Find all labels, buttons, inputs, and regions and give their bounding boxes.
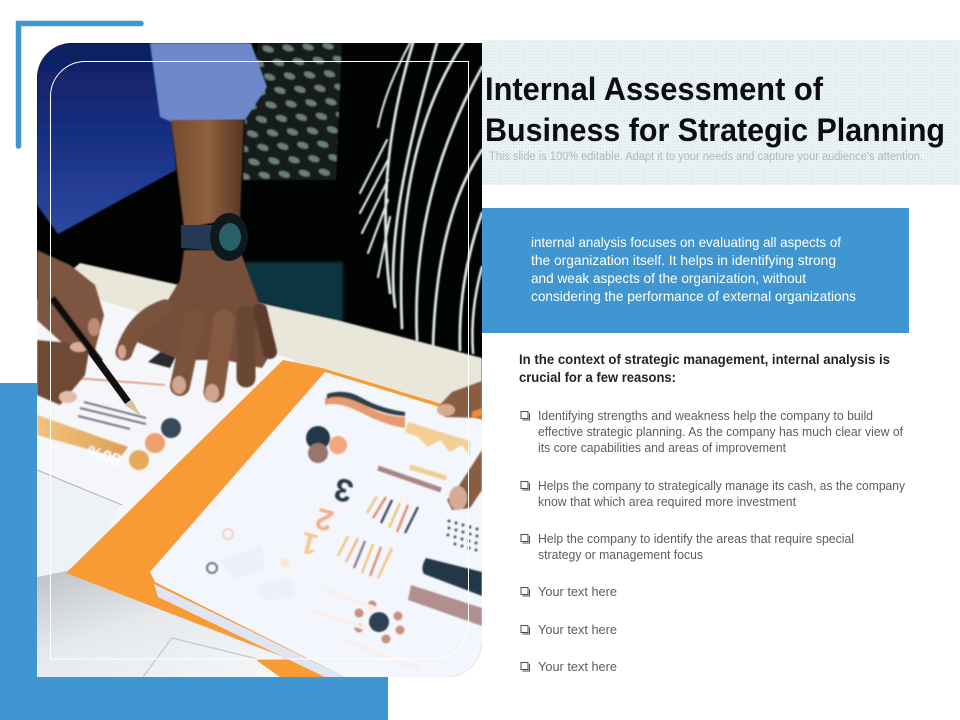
teal table shadow — [245, 262, 343, 322]
laptop — [37, 570, 286, 677]
patterned shirt behind arm — [243, 43, 342, 180]
placeholder item 1: Your text here — [538, 585, 617, 599]
reason 1: Identifying strengths and weakness help the company to build — [538, 409, 873, 423]
intro text: considering the performance of external organizations — [531, 288, 856, 304]
inner white frame on photo — [50, 61, 468, 659]
section heading: In the context of strategic management, internal analysis is — [519, 351, 890, 367]
table top — [37, 263, 482, 430]
section heading — [519, 351, 890, 385]
reason 2: Helps the company to strategically manage its cash, as the company — [538, 479, 906, 493]
pencil — [88, 350, 141, 416]
reason 2 — [538, 479, 906, 509]
left page: progress bar and circles: 80% — [85, 441, 123, 469]
photo: business team reviewing printed charts — [37, 43, 482, 677]
lower left sheet — [37, 470, 120, 600]
page infographics: 2 — [312, 501, 337, 537]
shirt sleeve — [150, 43, 267, 122]
orange folder — [66, 360, 482, 677]
central hand and wrist — [118, 250, 276, 402]
corner bracket — [18, 24, 141, 146]
intro text: internal analysis focuses on evaluating all aspects of — [531, 234, 841, 250]
bullet icons — [521, 412, 530, 671]
left hand holding pencil — [37, 250, 104, 405]
right fingers — [437, 381, 482, 510]
intro text: the organization itself. It helps in identifying strong — [531, 252, 836, 268]
intro text — [531, 234, 856, 304]
blue shirt — [37, 43, 176, 234]
title: Internal Assessment of — [485, 71, 823, 107]
intro text: and weak aspects of the organization, without — [531, 270, 806, 286]
page infographics: 1 — [297, 525, 322, 561]
reason 1 — [538, 409, 904, 455]
subtitle: This slide is 100% editable. Adapt it to your needs and capture your audience's attention. — [489, 151, 923, 163]
trackpad outline — [143, 638, 262, 677]
title — [485, 71, 945, 148]
blue intro panel — [482, 208, 909, 333]
striped garment — [360, 43, 482, 353]
reasons checklist — [521, 409, 906, 674]
placeholder item 3: Your text here — [538, 660, 617, 674]
reason 3: strategy or management focus — [538, 548, 703, 562]
title: Business for Strategic Planning — [485, 112, 945, 148]
wristwatch — [181, 213, 248, 261]
reason 2: know that which area required more investment — [538, 495, 797, 509]
folder tab — [256, 658, 325, 677]
reason 3 — [538, 532, 854, 562]
placeholder item 2: Your text here — [538, 623, 617, 637]
page infographics — [207, 392, 482, 670]
left page: progress bar and circles — [37, 375, 181, 470]
section heading: crucial for a few reasons: — [519, 369, 676, 385]
background blue block — [0, 383, 388, 720]
forearm — [171, 120, 244, 228]
reason 3: Help the company to identify the areas that require special — [538, 532, 854, 546]
reason 1: effective strategic planning. As the company has much clear view of — [538, 425, 904, 439]
page infographics: 3 — [330, 471, 357, 510]
left printed sheet — [37, 300, 295, 536]
reason 1: its core capabilities and areas of improvement — [538, 441, 787, 455]
chart detail under hand — [148, 351, 176, 369]
main charts page — [150, 372, 482, 677]
dotted title panel — [482, 40, 960, 185]
